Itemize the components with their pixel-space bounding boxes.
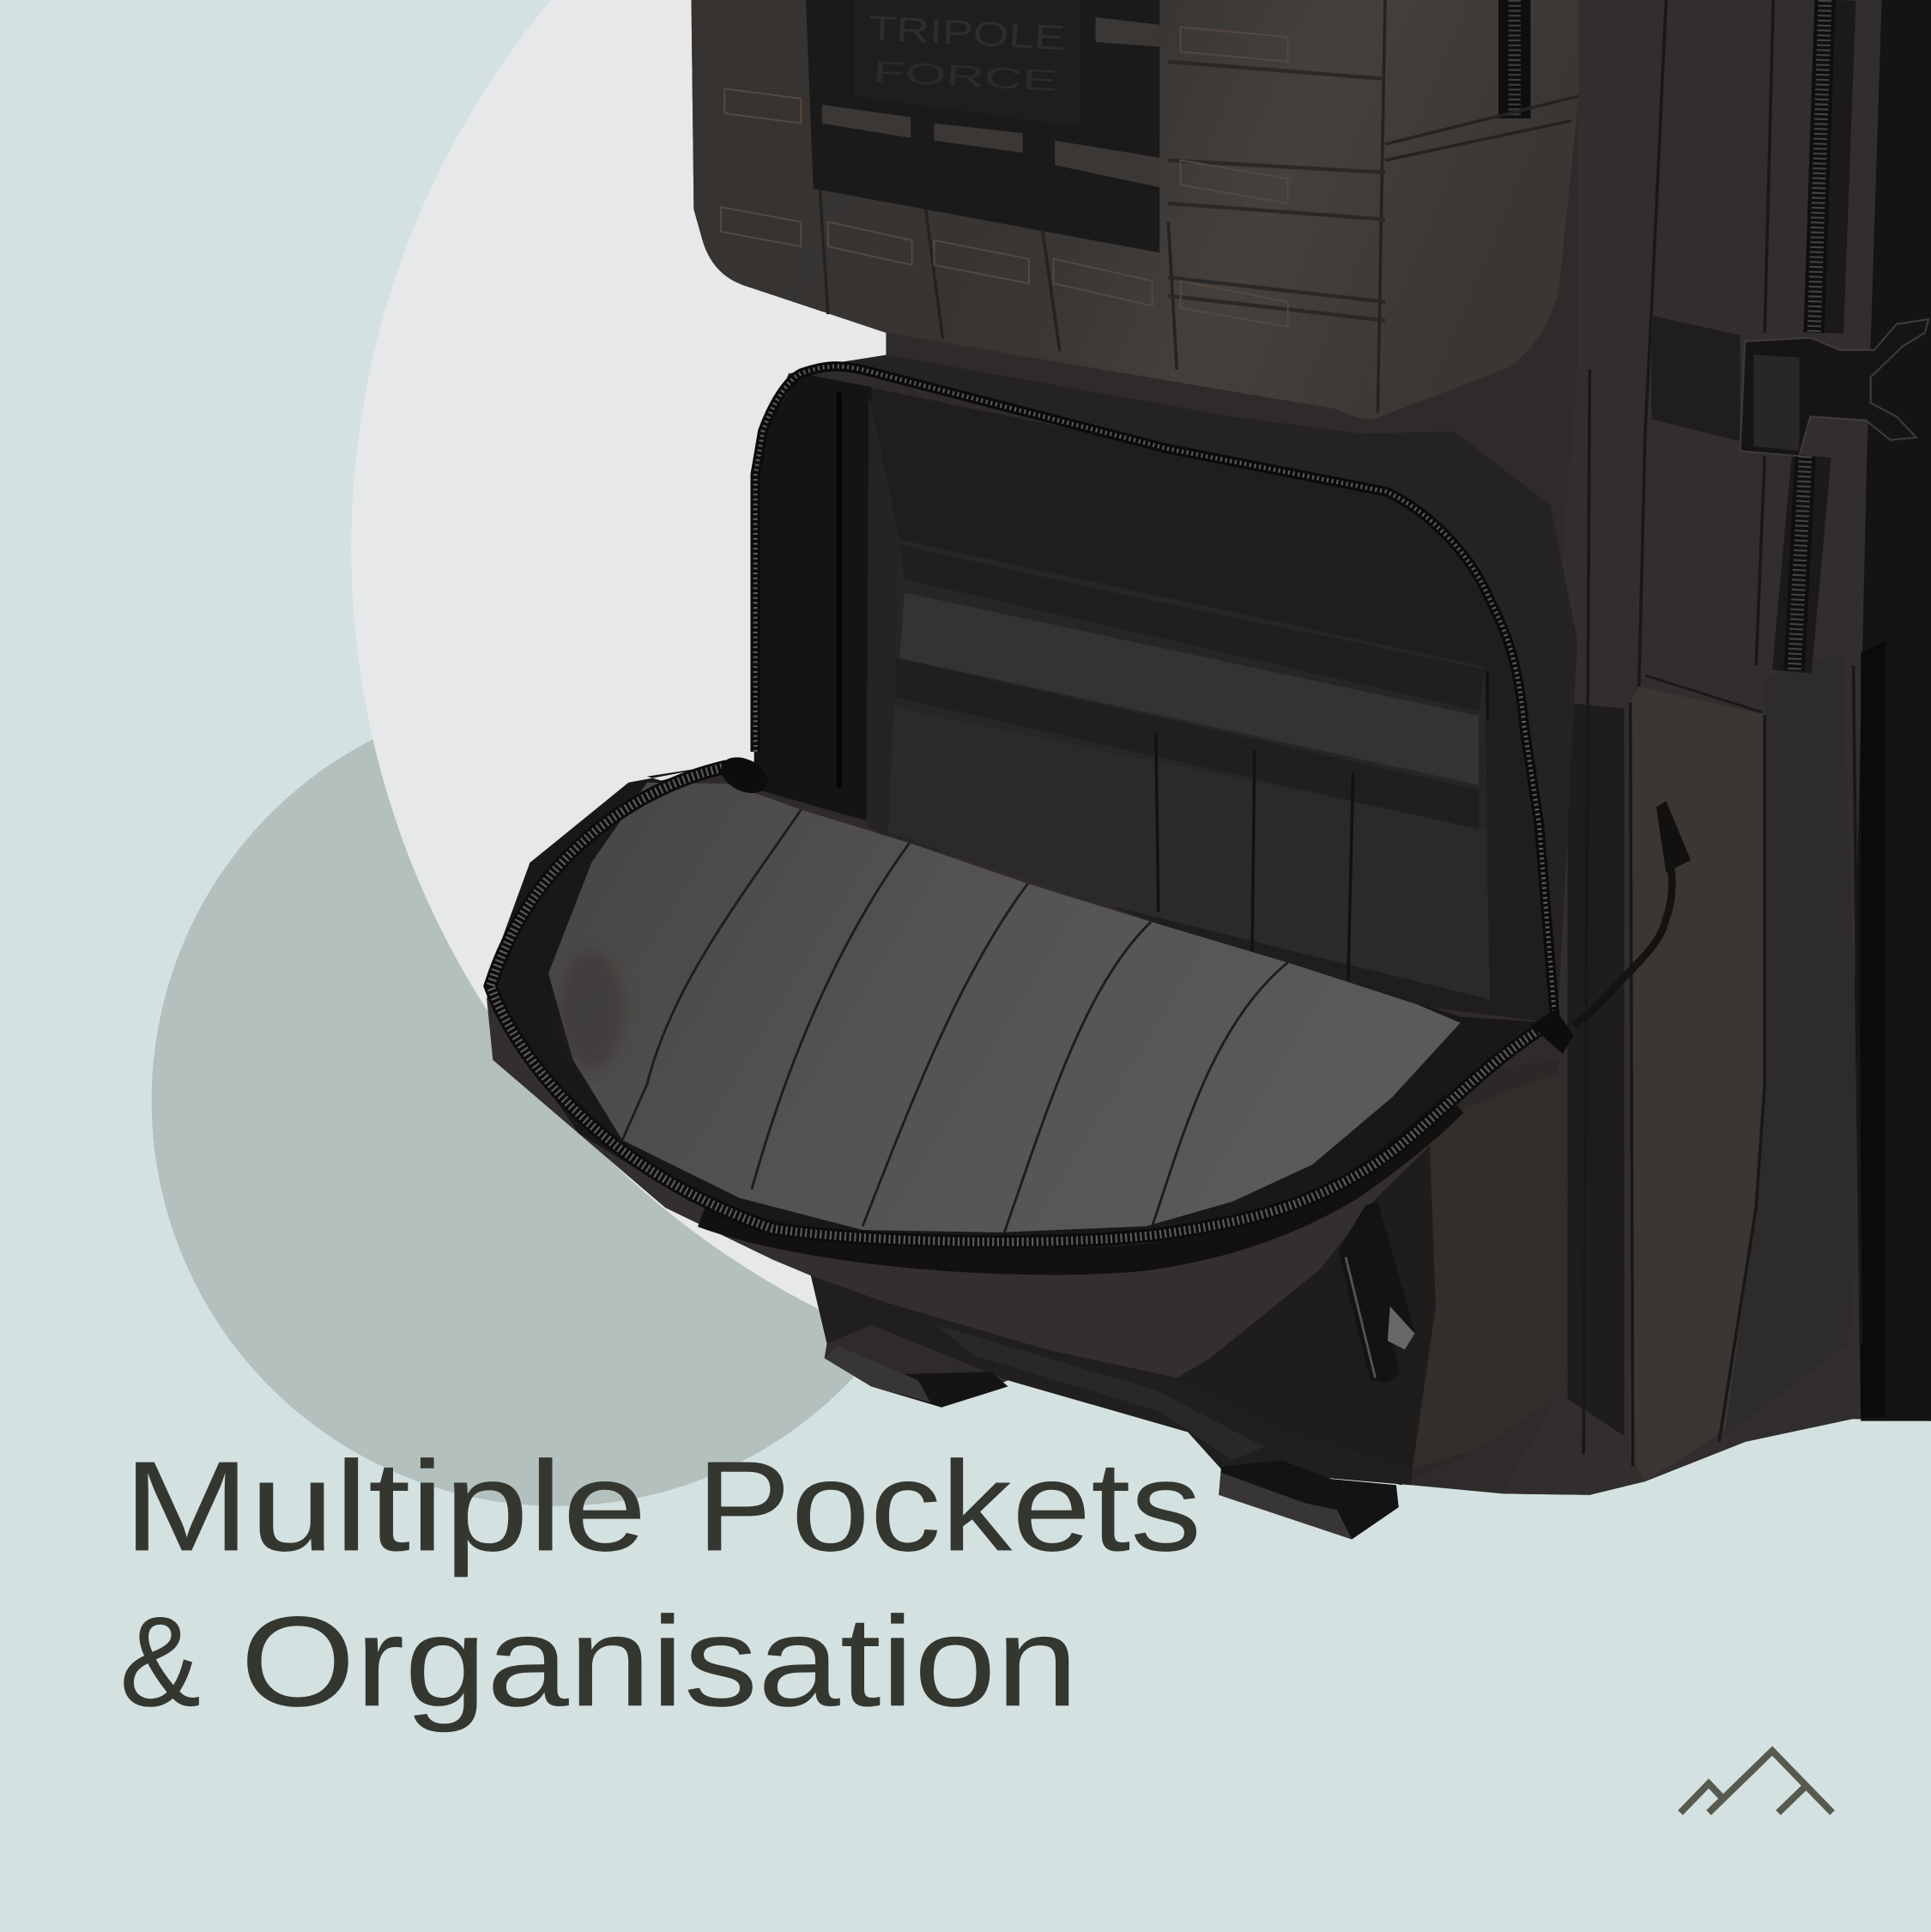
flap fabric shading [560,952,624,1069]
side pouch end [1177,1060,1565,1485]
right dark edge [1855,0,1931,1421]
pouch dark stripes [1168,62,1385,320]
zipper tape [702,1103,1454,1262]
side pocket seam [1645,675,1762,712]
title line 1 [124,1434,1202,1578]
laser cut slots [721,27,1288,327]
backpack body [487,0,1931,1495]
pouch seams [808,0,1578,413]
inner dark pocket [1177,1146,1436,1469]
open flap lid [487,750,1565,1485]
inner metal clip [1338,1202,1414,1383]
top pouch [692,0,1578,419]
icon: mountain logo [1680,1751,1832,1813]
organiser binding strip [866,394,899,838]
organiser dividers [1156,672,1487,980]
flap stitch lines [622,809,1288,1232]
title [119,1434,1202,1733]
title line 1: Multiple [124,1434,647,1578]
patch with brand name: TRIPOLE [867,9,1066,58]
pocket side lining [754,373,871,821]
flap grey fabric [548,783,1461,1232]
bottom webbing strap [811,1275,1413,1485]
body seams [1583,0,1861,1467]
light decorative circle [351,0,1931,1402]
dark shadow column by pocket [1567,702,1625,1436]
right side panel [1502,0,1882,1495]
left bottom buckle [825,1346,1008,1408]
side buckle [1740,319,1928,456]
title line 2: & [119,1590,201,1733]
zipper pull cord [1530,801,1691,1054]
lower flap outer fabric [487,998,1436,1378]
webbing gaps [822,17,1159,187]
organiser panel [888,540,1490,1000]
organiser straps [896,545,1485,829]
upper pocket trim [839,355,1577,1023]
flap zipper [490,766,1550,1242]
pouch zipper [1504,0,1526,118]
patch with brand name [854,0,1080,127]
flap dark lining [489,764,1550,1245]
title line 2: Organisation [240,1590,1078,1733]
title line 1: Pockets [696,1434,1202,1578]
main zipper [755,366,1555,1023]
open pocket interior [754,355,1577,1023]
backpack photo illustration [487,0,1931,1539]
side lighter panel [1631,687,1765,1481]
velcro panel [806,0,1159,252]
right bottom buckle [1219,1461,1399,1539]
side strap [1651,316,1740,441]
side zipper [1792,0,1836,672]
zipper pull knob [715,750,773,800]
side webbing panel [1725,653,1858,1436]
patch with brand name: FORCE [872,56,1058,98]
dark decorative circle [152,695,962,1506]
